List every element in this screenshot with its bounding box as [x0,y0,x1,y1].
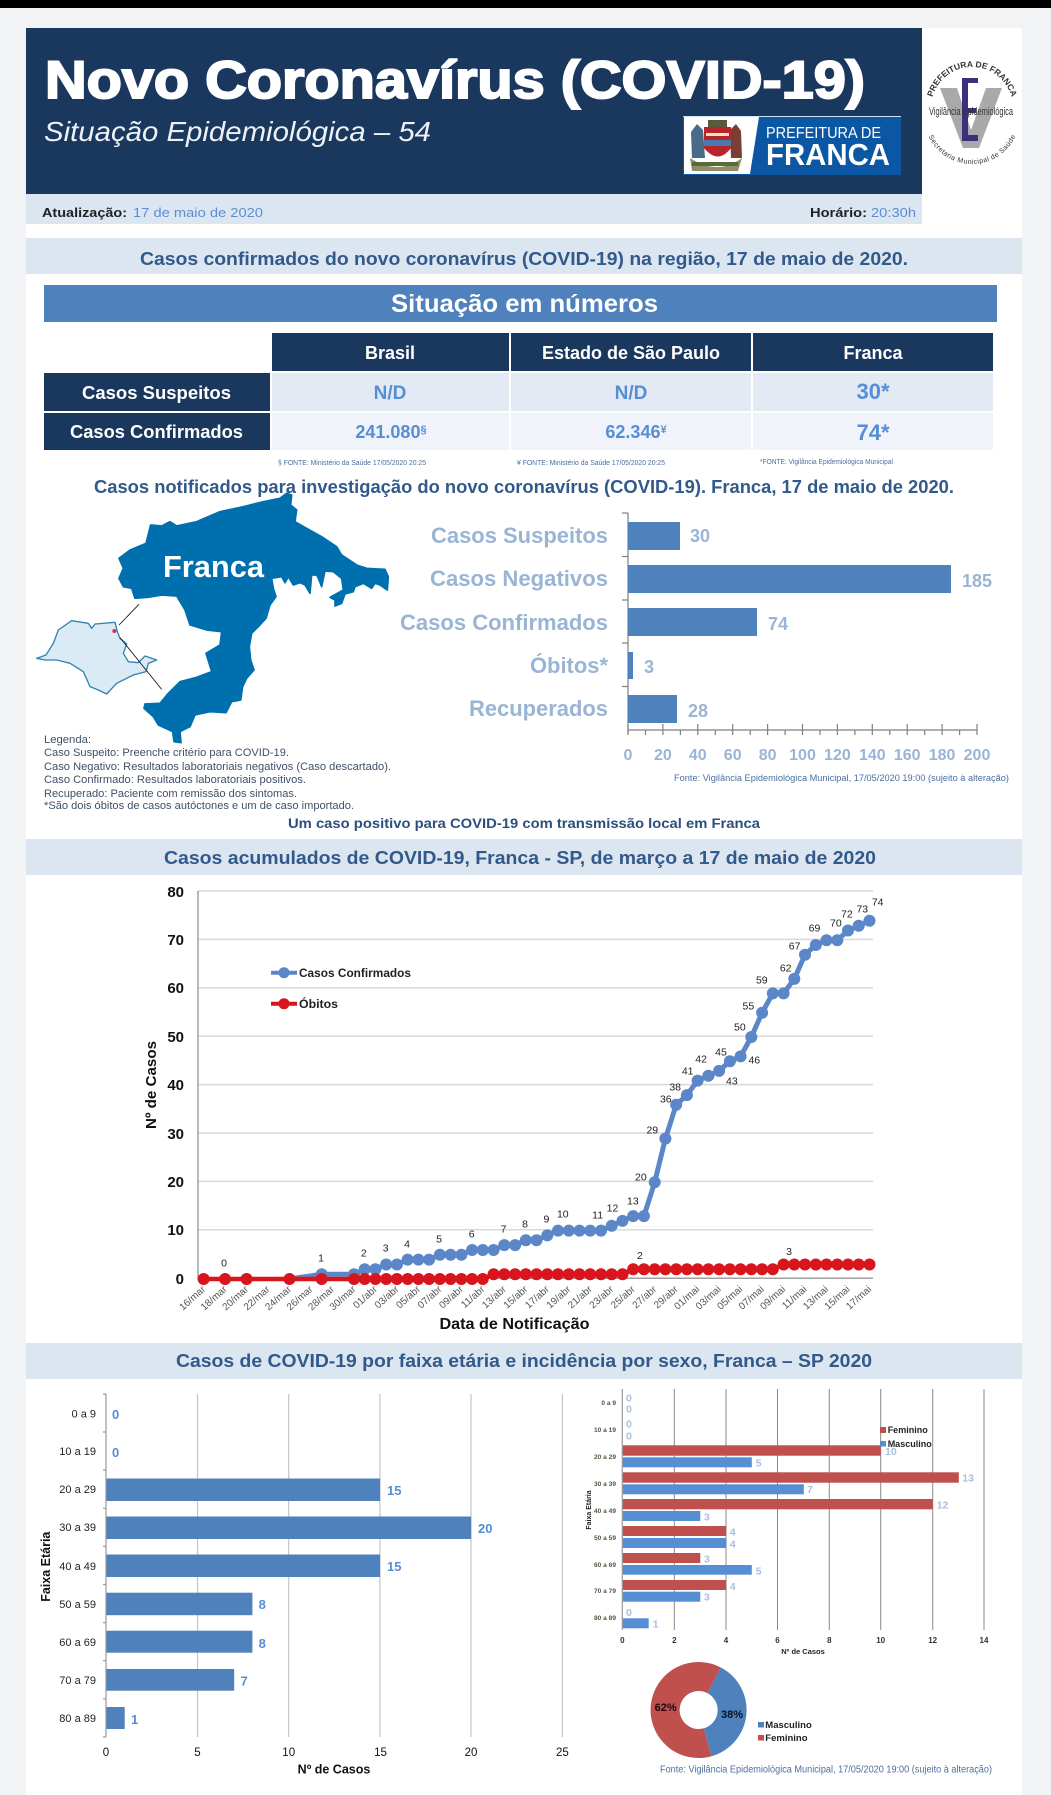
bar chart: casos notificados [400,513,992,764]
line chart: casos acumulados: 0 [176,1271,184,1288]
bar chart: casos por faixa etária: 5 [194,1747,201,1759]
x axis dates: 26/mar [285,1284,316,1313]
logo: Prefeitura de Franca: FRANCA [766,137,890,172]
data labels: 2 [637,1250,643,1262]
bar chart: casos por sexo: 4 [730,1538,736,1550]
data labels: 38 [669,1081,681,1093]
data labels: 12 [607,1203,618,1215]
data labels: 72 [841,908,853,920]
line chart legend: Óbitos [299,996,338,1011]
sex chart legend: Masculino [888,1439,932,1449]
bar chart: casos por sexo: 4 [730,1526,736,1538]
bar chart: casos por faixa etária: 15 [387,1559,401,1574]
sex chart legend: Feminino [888,1425,928,1435]
sex chart legend [880,1425,932,1449]
data labels: 62 [780,962,792,974]
bar chart: casos por sexo: 12 [937,1500,949,1512]
bar chart: casos por faixa etária: 0 [112,1445,119,1460]
donut chart: sexo: 38% [721,1709,743,1721]
section heading: casos confirmados: Casos confirmados do novo coronavírus (COVID-19) na região, 17 de maio de 2020. [140,249,908,269]
bar chart: casos notificados: 30 [690,526,710,546]
bar chart: casos por sexo: 10 [876,1636,886,1645]
data labels: 20 [635,1171,647,1183]
bar chart: casos por sexo: 3 [704,1512,710,1524]
table: situação em números: Estado de São Paulo [542,343,720,363]
bar chart: casos por sexo: 14 [980,1636,989,1645]
title: Novo Coronavírus (COVID-19) [45,51,865,110]
donut legend [758,1720,812,1744]
data labels: 46 [748,1054,760,1066]
data labels: 74 [872,896,884,908]
x axis dates: 28/mar [306,1284,337,1313]
bar chart: casos por sexo: 0 a 9 [601,1400,616,1407]
bar chart: casos notificados: 20 [654,747,672,764]
bar chart: casos por faixa etária: 10 a 19 [59,1446,96,1458]
donut legend: Masculino [765,1720,812,1731]
data labels: 2 [361,1248,367,1260]
bar chart: casos por faixa etária: 10 [282,1747,295,1759]
legend text: Recuperado: Paciente com remissão dos sintomas. [44,788,297,800]
x axis dates: 15/mai [823,1284,852,1312]
bar chart: casos por sexo: 0 [620,1636,625,1645]
bar chart: casos por sexo: 0 [626,1418,632,1430]
data labels [221,896,884,1270]
x axis dates: 16/mar [178,1284,209,1313]
bar chart: casos por faixa etária: 20 [465,1747,477,1759]
x axis dates: 11/abr [459,1284,488,1311]
line chart: casos acumulados: 50 [167,1029,184,1046]
line chart: casos acumulados [143,884,884,1333]
bar chart: casos por sexo: 10 [885,1446,897,1458]
bar chart: casos por sexo: 4 [730,1581,736,1593]
section heading: faixa etária e sexo: Casos de COVID-19 por faixa etária e incidência por sexo, Franca – SP 2020 [176,1350,872,1371]
bar chart: casos por faixa etária: 7 [240,1674,248,1688]
bar chart: casos notificados: 120 [824,747,851,764]
bar chart: casos notificados: 3 [644,657,654,677]
bar chart: casos notificados: 180 [929,747,956,764]
bar chart: casos notificados: Recuperados [469,696,608,721]
map: estado de São Paulo [37,621,157,694]
bar chart: casos por faixa etária: 25 [556,1747,569,1759]
bar chart: casos notificados: Casos Confirmados [400,610,608,635]
bar chart: casos notificados: 140 [859,747,886,764]
data labels: 3 [383,1243,389,1255]
x axis dates: 29/abr [652,1284,681,1311]
table: situação em números: § [420,424,427,436]
x axis dates: 05/abr [394,1284,423,1311]
bar chart: casos notificados: 0 [624,747,633,764]
table: situação em números: Casos Confirmados [70,422,243,442]
bar chart: casos por sexo: 80 a 89 [594,1615,616,1622]
legend text [44,734,391,812]
bar chart: casos por sexo: Nº de Casos [781,1647,825,1656]
x axis dates: 17/abr [523,1284,552,1311]
series: casos confirmados [290,921,870,1279]
x axis dates: 27/abr [631,1284,660,1311]
bar chart: casos notificados: 28 [688,701,708,721]
data labels: 70 [830,917,842,929]
section heading: casos acumulados [26,839,1022,875]
bar chart: casos notificados: 74 [768,614,788,634]
bar chart: casos por sexo: 2 [672,1636,677,1645]
data labels: 50 [734,1021,746,1033]
x axis dates: 15/abr [502,1284,531,1311]
line chart legend [271,966,411,1011]
bar chart: casos por sexo: 30 a 39 [594,1481,616,1488]
line chart: casos acumulados: 10 [167,1222,184,1239]
update strip: 20:30h [871,205,916,220]
bar chart: casos por faixa etária: 15 [374,1747,387,1759]
logo: Prefeitura de Franca [683,116,901,175]
data labels: 43 [726,1075,738,1087]
bar chart: casos por faixa etária: 60 a 69 [59,1637,96,1649]
bar chart: casos por sexo: 5 [756,1566,762,1578]
legend text: *São dois óbitos de casos autóctones e um de caso importado. [44,800,354,812]
bar chart: casos por sexo: 10 a 19 [594,1427,616,1434]
bar chart: casos notificados: Casos Suspeitos [431,523,608,548]
data labels: 4 [404,1239,410,1251]
bar chart: casos notificados: 185 [962,571,992,591]
section heading: casos acumulados: Casos acumulados de COVID-19, Franca - SP, de março a 17 de maio de 2020 [164,847,876,868]
logo: Prefeitura de Franca: PREFEITURA DE [766,125,881,142]
data labels: 1 [318,1253,324,1265]
line chart: casos acumulados: 30 [167,1126,184,1143]
update strip: Horário: [810,205,867,220]
situation banner: Situação em números [391,290,658,318]
table: situação em números: Franca [843,343,904,363]
subtitle: Situação Epidemiológica – 54 [44,116,431,147]
x axis dates: 03/mai [694,1284,724,1312]
x axis dates: 05/mai [715,1284,745,1312]
bar chart: casos por faixa etária: 70 a 79 [59,1675,96,1687]
data labels: 8 [522,1218,528,1230]
x axis dates: 01/abr [351,1284,380,1311]
x axis dates: 11/mai [780,1284,809,1312]
bar chart: casos por faixa etária: 0 [103,1747,109,1759]
donut chart: sexo: 62% [655,1702,677,1714]
x axis dates: 13/mai [801,1284,831,1312]
legend text: Caso Negativo: Resultados laboratoriais negativos (Caso descartado). [44,761,391,773]
x axis dates: 23/abr [588,1284,617,1311]
legend text: Caso Suspeito: Preenche critério para COVID-19. [44,747,289,759]
table: situação em números: § FONTE: Ministério da Saúde 17/05/2020 20:25 [278,460,426,467]
bar chart: casos por sexo: 3 [704,1592,710,1604]
x axis dates: 21/abr [566,1284,595,1311]
x axis dates: 13/abr [480,1284,509,1311]
data labels: 10 [557,1208,569,1220]
bar chart: casos por faixa etária: 8 [259,1597,266,1612]
series: óbitos [204,1264,870,1279]
x axis dates: 01/mai [672,1284,702,1312]
bar chart: casos por faixa etária: 1 [131,1712,138,1727]
bar chart: casos por sexo: 0 [626,1404,632,1416]
table: situação em números: N/D [615,383,647,404]
bar chart: casos por faixa etária: Nº de Casos [298,1762,370,1776]
x axis dates: 09/abr [437,1284,466,1311]
x axis dates: 30/mar [328,1284,359,1313]
data labels: 73 [856,904,868,916]
bar chart: casos por faixa etária: 15 [387,1483,401,1498]
bar chart: casos por faixa etária: 0 [112,1407,119,1422]
line chart: casos acumulados: 20 [167,1174,184,1191]
table: situação em números [44,333,993,467]
data labels: 42 [695,1053,707,1065]
bar chart: casos por sexo: 70 a 79 [594,1588,616,1595]
update strip: Atualização: [42,205,127,220]
bar chart: casos por sexo: 1 [653,1618,659,1630]
header banner [26,28,922,194]
section heading: faixa etária e sexo [26,1343,1022,1379]
x axis dates: 25/abr [609,1284,638,1311]
table: situação em números: 241.080 [355,422,420,442]
update strip [26,194,922,224]
bar chart: casos por sexo: 6 [775,1636,780,1645]
bar chart: casos por sexo: 8 [827,1636,832,1645]
axis title: Data de Notificação: Data de Notificação [440,1316,590,1333]
bar chart: casos por faixa etária: 0 a 9 [72,1408,96,1420]
bar chart: casos por sexo: 3 [704,1554,710,1566]
table: situação em números: 74* [856,420,890,445]
bar chart: casos por sexo: 0 [626,1430,632,1442]
bar chart: casos por faixa etária [39,1394,569,1776]
table: situação em números: Casos Suspeitos [82,383,231,403]
bar chart: casos por faixa etária: 50 a 59 [59,1599,96,1611]
x axis dates: 18/mar [199,1284,230,1313]
legend text: Caso Confirmado: Resultados laboratoriais positivos. [44,774,306,786]
line chart: casos acumulados: 60 [167,980,184,997]
table: situação em números: Brasil [365,343,415,363]
data labels: 3 [786,1246,792,1258]
data labels: 55 [743,1000,754,1012]
bar chart: casos por faixa etária: 40 a 49 [59,1561,96,1573]
bar chart: casos por faixa etária: 20 a 29 [59,1484,96,1496]
x axis dates: 24/mar [263,1284,294,1313]
bar chart: casos por faixa etária: 80 a 89 [59,1713,96,1725]
bar chart: casos por sexo: 12 [928,1636,938,1645]
bar chart: casos por faixa etária: Faixa Etária [39,1531,53,1602]
bar chart: casos por sexo: 5 [756,1458,762,1470]
bar chart: casos por faixa etária: 20 [478,1521,492,1536]
data labels: 11 [592,1210,603,1222]
data labels: 13 [627,1195,639,1207]
bar chart: casos por sexo: 4 [724,1636,729,1645]
bar chart: casos notificados: 40 [689,747,707,764]
bar chart: casos notificados: Casos Negativos [430,566,608,591]
x axis dates: 19/abr [545,1284,574,1311]
bar chart: casos por sexo [586,1389,989,1656]
table: situação em números: 62.346 [605,422,660,442]
data labels: 36 [660,1093,672,1105]
line chart: casos acumulados: 70 [167,932,184,949]
bar chart: casos por sexo: 20 a 29 [594,1454,616,1461]
x axis dates: 07/abr [416,1284,445,1311]
bar chart: casos notificados: 160 [894,747,921,764]
x axis dates: 03/abr [373,1284,402,1311]
bar chart: casos por sexo: 40 a 49 [594,1508,616,1515]
bar chart: casos por sexo: 60 a 69 [594,1562,616,1569]
data labels: 9 [543,1213,549,1225]
section heading: casos confirmados [26,238,1022,274]
data labels: 45 [715,1046,727,1058]
data labels: 0 [221,1258,227,1270]
legend text: Legenda: [44,734,91,746]
source note: sex chart: Fonte: Vigilância Epidemiológica Municipal, 17/05/2020 19:00 (sujeito à alteração) [660,1764,992,1776]
bar chart: casos por sexo: Faixa Etária [586,1490,593,1530]
x axis dates: 22/mar [242,1284,273,1313]
bar chart: casos por sexo: 0 [626,1392,632,1404]
line chart: casos acumulados: 40 [167,1077,184,1094]
axis title: Nº de Casos: Nº de Casos [143,1041,160,1129]
callout: transmissão local: Um caso positivo para COVID-19 com transmissão local em Franca [288,815,760,831]
donut chart: sexo [651,1662,812,1758]
situation banner [44,285,997,322]
bar chart: casos por faixa etária: 30 a 39 [59,1522,96,1534]
bar chart: casos notificados: Óbitos* [530,653,608,678]
bar chart: casos notificados: 100 [789,747,816,764]
bar chart: casos por sexo: 13 [962,1472,974,1484]
bar chart: casos por sexo: 0 [626,1607,632,1619]
x axis dates [178,1284,874,1313]
line chart legend: Casos Confirmados [299,966,411,980]
bar chart: casos notificados: 200 [964,747,990,764]
x axis dates: 07/mai [737,1284,767,1312]
data labels: 5 [436,1234,442,1246]
logo: Vigilância Epidemiológica: Secretaria Municipal de Saúde [929,135,1015,165]
x axis dates: 20/mar [221,1284,252,1313]
heading: casos notificados: Casos notificados para investigação do novo coronavírus (COVID-19). Franca, 17 de maio de 2020. [94,477,954,497]
x axis dates: 09/mai [758,1284,788,1312]
bar chart: casos por sexo: 7 [807,1484,813,1496]
data labels: 59 [756,974,768,986]
data labels: 69 [809,922,820,934]
bar chart: casos por sexo: 50 a 59 [594,1535,616,1542]
map: município de Franca: Franca [163,549,265,584]
logo: Vigilância Epidemiológica [927,61,1016,165]
line chart: casos acumulados: 80 [167,884,184,901]
bar chart: casos notificados: 80 [759,747,777,764]
data labels: 67 [789,940,801,952]
table: situação em números: 30* [856,379,890,404]
source note: bar chart: Fonte: Vigilância Epidemiológica Municipal, 17/05/2020 19:00 (sujeito à alteração) [674,773,1009,784]
donut legend: Feminino [765,1733,808,1744]
data labels: 41 [682,1065,694,1077]
table: situação em números: ¥ FONTE: Ministério da Saúde 17/05/2020 20:25 [517,460,665,467]
x axis dates: 17/mai [844,1284,874,1312]
map: município de Franca [37,493,388,743]
update strip: 17 de maio de 2020 [133,205,263,220]
table: situação em números: *FONTE: Vigilância Epidemiológica Municipal [760,459,893,466]
data labels: 7 [501,1223,507,1235]
table: situação em números: N/D [374,383,406,404]
table: situação em números: ¥ [660,424,667,436]
logo: Vigilância Epidemiológica: Vigilância Epidemiológica [929,106,1014,118]
logo: Vigilância Epidemiológica: PREFEITURA DE FRANCA [927,61,1016,97]
data labels: 6 [469,1228,475,1240]
bar chart: casos por faixa etária: 8 [259,1636,266,1651]
data labels: 29 [646,1124,658,1136]
bar chart: casos notificados: 60 [724,747,742,764]
